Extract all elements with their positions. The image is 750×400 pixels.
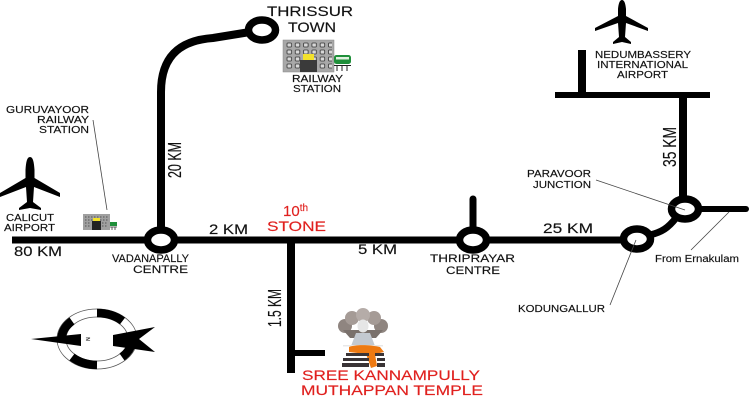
label: 10th Stone: th (300, 203, 308, 214)
main east-west road (12, 236, 632, 244)
road to Thrissur (161, 32, 250, 232)
distance: 5 km: 5 KM (358, 241, 397, 257)
junction: Thriprayar (460, 230, 486, 250)
label: Guruvayoor railway station: STATION (39, 125, 89, 136)
label: Kodungallur: KODUNGALLUR (518, 304, 605, 315)
label: Guruvayoor railway station: RAILWAY (37, 115, 89, 126)
road linking Kodungallur and Paravoor (650, 218, 676, 235)
label: temple name: SREE KANNAMPULLY (302, 367, 481, 383)
label: Vadanapally Centre: VADANAPALLY (112, 253, 190, 265)
distance: 35 km: 35 KM (660, 127, 680, 167)
icon: temple deity (338, 308, 388, 368)
leader line: Paravoor (596, 180, 685, 210)
label: 10th Stone (267, 203, 326, 234)
distance: 20 km: 20 KM (165, 142, 185, 178)
label: 10th Stone: STONE (267, 218, 326, 234)
label: temple name: MUTHAPPAN TEMPLE (301, 382, 483, 398)
label: 10th Stone: 10 (283, 203, 300, 220)
label: Paravoor Junction: PARAVOOR (527, 169, 591, 180)
junction: Vadanapally (148, 230, 174, 250)
icon: Thrissur railway station (283, 40, 351, 72)
label: Thriprayar Centre (430, 253, 515, 277)
label: Calicut Airport: CALICUT (6, 213, 54, 224)
label: Thrissur Town (267, 3, 353, 35)
junction: Thrissur (248, 20, 276, 40)
label: Thrissur railway station (292, 74, 343, 95)
label: From Ernakulam: From Ernakulam (655, 254, 739, 265)
distance: 80 km: 80 KM (14, 243, 62, 259)
road from Ernakulam (700, 206, 746, 212)
label: Thrissur railway station: STATION (293, 84, 341, 95)
label: Thrissur Town: THRISSUR (267, 3, 353, 19)
label: Guruvayoor railway station (6, 105, 89, 136)
icon: Nedumbassery airplane (595, 0, 648, 44)
label: Thrissur railway station: RAILWAY (292, 74, 343, 85)
leader line: Guruvayoor station (93, 120, 107, 210)
leader line: Ernakulam (691, 212, 729, 250)
label: Paravoor Junction (527, 169, 591, 191)
icon: Calicut airplane (0, 157, 60, 210)
label: Nedumbassery International Airport: AIRPORT (617, 70, 668, 81)
label: Vadanapally Centre: CENTRE (133, 264, 188, 276)
label: Thriprayar Centre: CENTRE (446, 265, 500, 277)
road to temple (291, 240, 325, 373)
label: Nedumbassery International Airport: INTERNATIONAL (597, 60, 688, 71)
icon: compass (31, 309, 155, 369)
road north from Thriprayar (470, 199, 476, 232)
leader line: Kodungallur (610, 240, 636, 305)
label: Calicut Airport: AIRPORT (4, 223, 55, 234)
junction: Kodungallur (624, 229, 650, 249)
distance: 1.5 km: 1.5 KM (265, 289, 285, 327)
distance: 2 km: 2 KM (209, 221, 248, 237)
label: Guruvayoor railway station: GURUVAYOOR (6, 105, 89, 116)
label: Vadanapally Centre (112, 253, 190, 276)
label: Nedumbassery International Airport (595, 50, 691, 81)
label: Nedumbassery International Airport: NEDUMBASSERY (595, 50, 691, 61)
label: Paravoor Junction: JUNCTION (533, 180, 591, 191)
label: Calicut Airport (4, 213, 55, 234)
icon: Guruvayoor railway station (83, 214, 117, 230)
road to Nedumbassery airport (555, 50, 710, 200)
junction: Paravoor (672, 199, 698, 219)
label: Thrissur Town: TOWN (288, 19, 336, 35)
distance: 25 km: 25 KM (543, 220, 593, 236)
label: temple name (301, 367, 483, 398)
label: Thriprayar Centre: THRIPRAYAR (430, 253, 515, 265)
icon: compass: N (84, 337, 90, 341)
